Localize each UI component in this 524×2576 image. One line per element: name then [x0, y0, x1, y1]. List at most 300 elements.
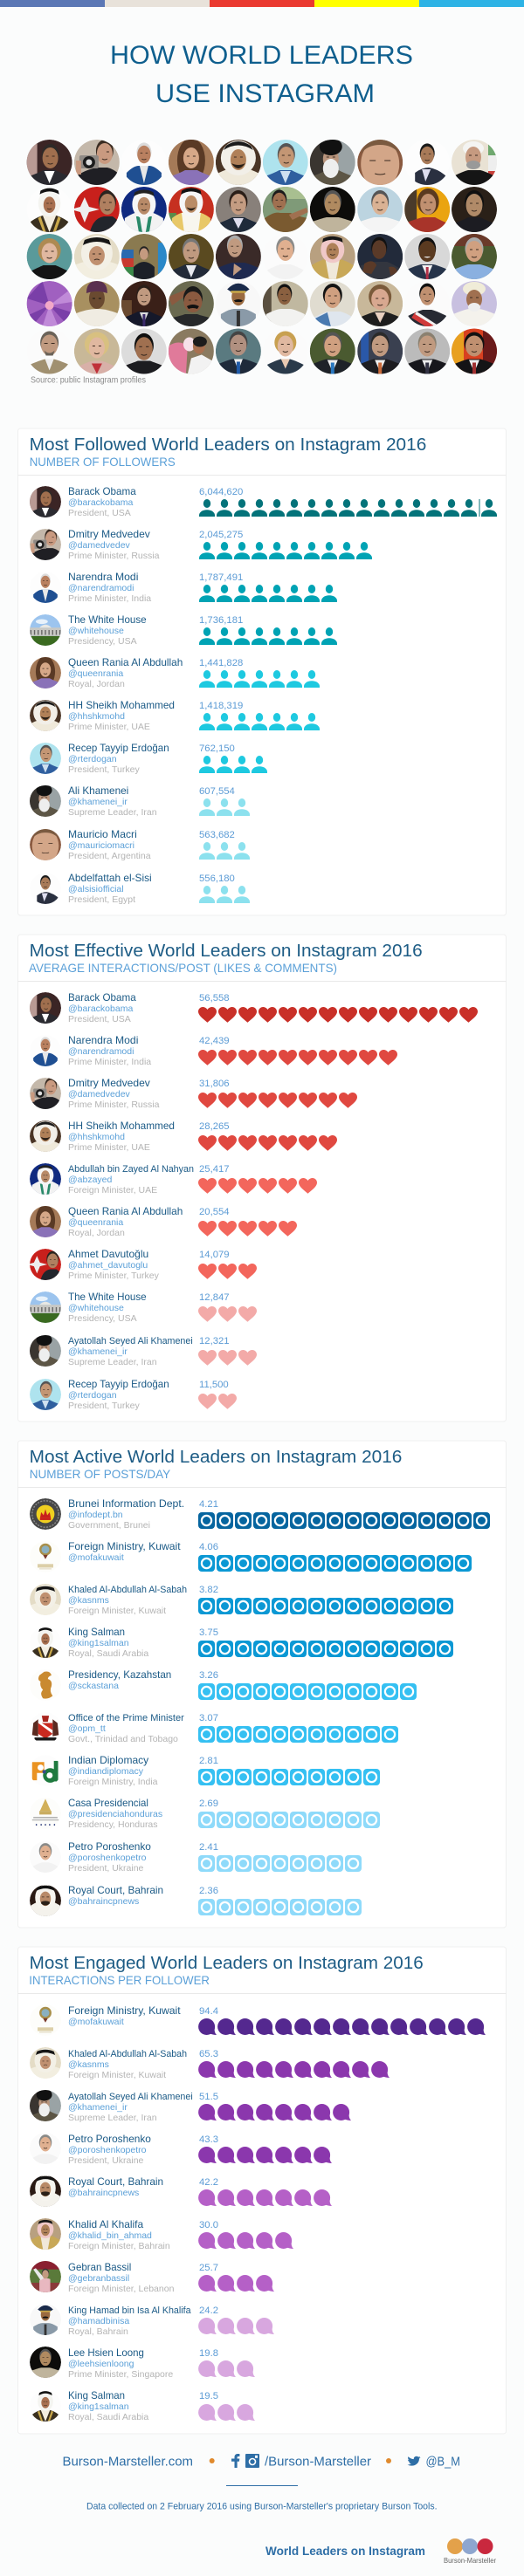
heart icons	[198, 1007, 479, 1023]
heading: most engaged: Most Engaged World Leaders on Instagram 2016	[30, 1954, 424, 1973]
name block: Prime Minister, UAE	[68, 722, 150, 732]
name block: Presidency, Kazahstan	[68, 1668, 171, 1681]
value: 2.69	[199, 1798, 218, 1809]
value: 1,441,828	[199, 658, 243, 668]
name block	[68, 571, 151, 604]
followers icons	[199, 670, 321, 688]
logo: Brunei crest	[30, 1498, 61, 1530]
name block: King Salman	[68, 1626, 125, 1638]
post icons	[198, 1769, 382, 1785]
logo: Kazakhstan dragon	[30, 1669, 61, 1701]
followers icons	[199, 886, 252, 903]
name block: Ahmet Davutoğlu	[68, 1248, 148, 1260]
name block: Presidency, Honduras	[68, 1819, 158, 1830]
value: 2.41	[199, 1842, 218, 1853]
name block: Presidency, USA	[68, 1313, 137, 1324]
heading: most active: NUMBER OF POSTS/DAY	[30, 1467, 171, 1481]
followers icons	[199, 798, 252, 816]
name block	[68, 1585, 187, 1616]
value: 563,682	[199, 830, 235, 840]
footer tagline: World Leaders on Instagram	[265, 2544, 425, 2558]
value: 2,045,275	[199, 530, 243, 540]
name block: @khalid_bin_ahmad	[68, 2230, 152, 2241]
value: 3.82	[199, 1585, 218, 1595]
row: The White House	[30, 613, 339, 647]
name block	[68, 2218, 170, 2251]
value: 607,554	[199, 786, 235, 797]
name block: President, Turkey	[68, 1401, 140, 1411]
post icons	[198, 1899, 363, 1915]
name block: Supreme Leader, Iran	[68, 807, 157, 818]
value: 556,180	[199, 874, 235, 884]
name block: Royal, Saudi Arabia	[68, 2412, 148, 2422]
name block: Petro Poroshenko	[68, 1840, 151, 1853]
icon: instagram	[245, 2454, 259, 2468]
name block	[68, 2346, 173, 2380]
name block: Khaled Al-Abdullah Al-Sabah	[68, 2049, 187, 2059]
name block	[68, 2092, 193, 2123]
name block	[68, 2049, 187, 2080]
name block	[68, 1626, 148, 1659]
name block	[68, 1378, 169, 1411]
name block: Abdullah bin Zayed Al Nahyan	[68, 1164, 194, 1175]
row: Ahmet Davutoglu	[27, 1248, 259, 1281]
name block: Foreign Minister, Lebanon	[68, 2284, 175, 2294]
name block: Office of the Prime Minister	[68, 1713, 184, 1723]
name block: Royal, Jordan	[68, 1228, 125, 1238]
name block: Dmitry Medvedev	[68, 1077, 150, 1089]
name block: Govt., Trinidad and Tobago	[68, 1734, 178, 1744]
name block: @damedvedev	[68, 540, 131, 551]
name block: President, Ukraine	[68, 2155, 144, 2166]
row: Dmitry Medvedev	[30, 1077, 359, 1110]
row: Recep Tayyip Erdogan	[30, 1378, 238, 1411]
followers icons	[199, 842, 252, 860]
heading: most effective	[29, 942, 423, 975]
portrait: Erdogan	[30, 1379, 61, 1410]
value: 1,418,319	[199, 701, 243, 711]
name block: Barack Obama	[68, 485, 136, 497]
name block: Supreme Leader, Iran	[68, 1357, 157, 1367]
name block	[68, 613, 147, 647]
value: 42.2	[199, 2177, 218, 2188]
portrait: Abdullah bin Zayed	[30, 1163, 61, 1195]
post icons	[198, 1812, 382, 1828]
name block: King Salman	[68, 2389, 125, 2401]
row: Queen Rania Al Abdullah	[30, 1205, 299, 1238]
row: Foreign Ministry, Kuwait	[30, 2004, 486, 2036]
name block: Prime Minister, Russia	[68, 1100, 160, 1110]
name block: Ayatollah Seyed Ali Khamenei	[68, 2092, 193, 2102]
name block	[68, 528, 160, 561]
name block: @poroshenkopetro	[68, 2145, 147, 2155]
name block	[68, 1668, 171, 1691]
name block: Narendra Modi	[68, 571, 138, 583]
name block: @sckastana	[68, 1681, 119, 1691]
portrait: Narendra Modi	[33, 1037, 58, 1066]
heading: most followed: Most Followed World Leaders on Instagram 2016	[30, 435, 426, 455]
name block: Khalid Al Khalifa	[68, 2218, 144, 2230]
row: Gebran Bassil	[30, 2261, 275, 2294]
speech bubble icons	[198, 2018, 486, 2035]
name block: @mauriciomacri	[68, 840, 134, 851]
name block: @poroshenkopetro	[68, 1853, 147, 1863]
name block	[68, 2305, 191, 2337]
name block: @indiandiplomacy	[68, 1766, 144, 1777]
speech bubble icons	[198, 2189, 333, 2206]
name block	[68, 1840, 151, 1874]
value: 6,044,620	[199, 487, 243, 497]
heart icons	[198, 1178, 319, 1194]
name block: Gebran Bassil	[68, 2261, 131, 2273]
post icons	[198, 1683, 418, 1700]
value: 25,417	[199, 1164, 230, 1175]
name block: @hamadbinisa	[68, 2316, 129, 2326]
row: The White House	[30, 1291, 259, 1324]
logo: Honduras crest	[30, 1798, 61, 1829]
name block	[68, 1164, 194, 1196]
name block: President, USA	[68, 508, 131, 518]
name block: Petro Poroshenko	[68, 2133, 151, 2145]
name block: @narendramodi	[68, 1046, 134, 1057]
value: 3.26	[199, 1670, 218, 1681]
row: King Hamad bin Isa Al Khalifa	[30, 2304, 275, 2337]
row: Royal Court, Bahrain	[30, 2175, 333, 2207]
name block	[68, 1497, 184, 1531]
name block: HH Sheikh Mohammed	[68, 1120, 175, 1132]
name block: Royal, Saudi Arabia	[68, 1648, 148, 1659]
title	[110, 41, 413, 108]
name block: The White House	[68, 1291, 147, 1303]
heart icons	[198, 1306, 259, 1322]
row: Brunei Information Dept.	[30, 1497, 492, 1531]
speech bubble icons	[198, 2232, 294, 2249]
name block: @rterdogan	[68, 1390, 117, 1401]
value: 30.0	[199, 2220, 218, 2230]
name block: Prime Minister, Singapore	[68, 2369, 173, 2380]
value: 19.5	[199, 2391, 218, 2401]
name block: @mofakuwait	[68, 1552, 124, 1563]
name block	[68, 2389, 148, 2422]
row: Petro Poroshenko	[30, 2133, 333, 2166]
name block: Foreign Minister, Kuwait	[68, 1606, 166, 1616]
heart icons	[198, 1221, 299, 1237]
portrait: Dmitry Medvedev	[30, 529, 61, 560]
name block: @hhshkmohd	[68, 1132, 125, 1142]
name block: @alsisiofficial	[68, 884, 124, 894]
speech bubble icons	[198, 2318, 275, 2334]
portrait: Barack Obama	[30, 486, 61, 517]
name block	[68, 1884, 163, 1907]
row: Ayatollah Seyed Ali Khamenei	[30, 1334, 259, 1367]
name block: @presidenciahonduras	[68, 1809, 162, 1819]
portrait: Khaled Al-Sabah	[30, 2047, 61, 2079]
portrait: Ahmet Davutoglu	[27, 1249, 61, 1280]
portrait: The White House	[30, 614, 61, 646]
footer links	[63, 2454, 460, 2470]
portrait: King Salman	[30, 1627, 61, 1658]
row: Barack Obama	[30, 991, 479, 1024]
name block: Foreign Minister, UAE	[68, 1185, 157, 1196]
name block: Presidency, USA	[68, 636, 137, 647]
row: Queen Rania Al Abdullah	[30, 656, 321, 689]
name block: Queen Rania Al Abdullah	[68, 656, 183, 668]
value: 11,500	[199, 1380, 229, 1390]
footer links: @B_M	[426, 2454, 460, 2470]
portrait: Ayatollah Khamenei	[30, 2089, 61, 2121]
followers icons	[199, 713, 321, 730]
portrait: Lee Hsien Loong	[30, 2346, 61, 2378]
post icons	[198, 1726, 400, 1743]
row: Narendra Modi	[33, 1037, 397, 1066]
heart icons	[198, 1394, 238, 1409]
speech bubble icons	[198, 2404, 256, 2421]
portrait: Gebran Bassil	[30, 2261, 61, 2292]
name block: Prime Minister, UAE	[68, 1142, 150, 1153]
portrait: Queen Rania	[30, 656, 61, 689]
colour strip	[0, 0, 524, 7]
name block: @barackobama	[68, 497, 133, 508]
value: 20,554	[199, 1207, 230, 1217]
value: 1,787,491	[199, 572, 243, 583]
row: King Salman	[30, 1626, 455, 1659]
value: 3.75	[199, 1627, 218, 1638]
post icons	[198, 1855, 363, 1872]
name block: Dmitry Medvedev	[68, 528, 150, 540]
heading: most engaged: INTERACTIONS PER FOLLOWER	[29, 1973, 210, 1987]
portrait: King Hamad	[30, 2304, 61, 2335]
name block: King Hamad bin Isa Al Khalifa	[68, 2305, 191, 2316]
value: 2.36	[199, 1886, 218, 1896]
speech bubble icons	[198, 2104, 352, 2120]
portrait: Petro Poroshenko	[30, 1841, 61, 1873]
title: HOW WORLD LEADERS	[110, 41, 413, 70]
value: 762,150	[199, 743, 235, 754]
portrait: Narendra Modi	[33, 573, 58, 603]
row: Casa Presidencial	[30, 1797, 382, 1830]
logo: Burson-Marsteller: Burson-Marsteller	[444, 2556, 496, 2565]
name block: @khamenei_ir	[68, 1346, 128, 1357]
name block: The White House	[68, 613, 147, 626]
row: Barack Obama	[30, 485, 499, 518]
value: 31,806	[199, 1079, 230, 1089]
data note: Data collected on 2 February 2016 using Burson-Marsteller's proprietary Burson Tools.	[86, 2501, 437, 2511]
heading: most effective: AVERAGE INTERACTIONS/POST (LIKES & COMMENTS)	[29, 961, 337, 975]
name block: Barack Obama	[68, 991, 136, 1004]
footer links: Burson-Marsteller.com	[63, 2454, 193, 2470]
name block	[68, 1120, 175, 1153]
name block	[68, 991, 136, 1024]
portrait: Khaled Al-Sabah	[30, 1584, 61, 1615]
heading: most effective: Most Effective World Leaders on Instagram 2016	[30, 942, 423, 961]
name block: Recep Tayyip Erdoğan	[68, 1378, 169, 1390]
row: Indian Diplomacy	[30, 1754, 382, 1787]
followers icons	[199, 756, 269, 773]
name block: @infodept.bn	[68, 1510, 123, 1520]
name block	[68, 2133, 151, 2166]
name block: HH Sheikh Mohammed	[68, 699, 175, 711]
row: Royal Court, Bahrain	[30, 1884, 363, 1916]
panel: most effective	[17, 935, 507, 1422]
source note: Source: public Instagram profiles	[31, 375, 146, 386]
name block: @bahraincpnews	[68, 1896, 139, 1907]
speech bubble icons	[198, 2147, 333, 2163]
footer links: /Burson-Marsteller	[265, 2454, 371, 2470]
portrait: Queen Rania	[30, 1205, 61, 1237]
name block: Prime Minister, Russia	[68, 551, 160, 561]
name block: Royal Court, Bahrain	[68, 1884, 163, 1896]
name block: @king1salman	[68, 2401, 129, 2412]
name block	[68, 872, 152, 905]
portrait: Abdelfattah el-Sisi	[37, 875, 58, 904]
name block	[68, 1248, 160, 1281]
name block	[68, 2004, 181, 2027]
name block	[68, 1713, 184, 1744]
row: Abdelfattah el-Sisi	[37, 874, 250, 904]
name block: @khamenei_ir	[68, 2102, 128, 2113]
row: HH Sheikh Mohammed	[30, 699, 321, 732]
row: Petro Poroshenko	[30, 1840, 363, 1874]
row: Dmitry Medvedev	[30, 528, 374, 561]
name block: President, Turkey	[68, 764, 140, 775]
panel: most active	[17, 1441, 507, 1928]
portrait: Mauricio Macri	[30, 829, 61, 863]
name block: @queenrania	[68, 668, 123, 679]
name block: @king1salman	[68, 1638, 129, 1648]
portrait: Royal Court	[30, 1885, 61, 1916]
value: 14,079	[199, 1250, 230, 1260]
value: 42,439	[199, 1036, 230, 1046]
name block	[68, 1205, 183, 1238]
value: 65.3	[199, 2049, 218, 2059]
speech bubble icons	[198, 2360, 256, 2377]
name block: @leehsienloong	[68, 2359, 134, 2369]
portrait: King Salman	[30, 2390, 61, 2422]
portrait: Petro Poroshenko	[30, 2133, 61, 2164]
name block	[68, 656, 183, 689]
name block: Prime Minister, Turkey	[68, 1271, 160, 1281]
portrait: Erdogan	[30, 743, 61, 774]
name block: Narendra Modi	[68, 1034, 138, 1046]
heart icons	[198, 1093, 359, 1108]
value: 28,265	[199, 1121, 230, 1132]
row: Lee Hsien Loong	[30, 2346, 256, 2380]
value: 51.5	[199, 2092, 218, 2102]
heart icons	[198, 1050, 399, 1065]
name block: @opm_tt	[68, 1723, 106, 1734]
value: 1,736,181	[199, 615, 243, 626]
name block: Supreme Leader, Iran	[68, 2113, 157, 2123]
name block: @abzayed	[68, 1175, 113, 1185]
portrait: The White House	[30, 1291, 61, 1323]
name block: Queen Rania Al Abdullah	[68, 1205, 183, 1217]
name block	[68, 1754, 158, 1787]
name block: President, Argentina	[68, 851, 151, 861]
name block: @kasnms	[68, 2059, 109, 2070]
name block	[68, 784, 157, 818]
speech bubble icons	[198, 2275, 275, 2292]
name block	[68, 1336, 193, 1367]
panel: most followed	[17, 428, 507, 915]
portrait: Ayatollah Khamenei	[30, 1334, 61, 1367]
row: Khaled Al-Abdullah Al-Sabah	[30, 2047, 390, 2080]
name block: Abdelfattah el-Sisi	[68, 872, 152, 884]
name block: Lee Hsien Loong	[68, 2346, 144, 2359]
name block: Foreign Ministry, Kuwait	[68, 1540, 181, 1552]
value: 12,321	[199, 1336, 230, 1346]
name block: @mofakuwait	[68, 2017, 124, 2027]
portrait: Royal Court	[30, 2175, 61, 2207]
value: 19.8	[199, 2348, 218, 2359]
name block	[68, 2175, 163, 2198]
name block: President, Egypt	[68, 894, 135, 905]
post icons	[198, 1512, 492, 1529]
row: Abdullah bin Zayed Al Nahyan	[30, 1163, 319, 1196]
name block: @queenrania	[68, 1217, 123, 1228]
value: 94.4	[199, 2006, 218, 2017]
name block: Royal, Jordan	[68, 679, 125, 689]
name block: Prime Minister, India	[68, 593, 151, 604]
name block: Mauricio Macri	[68, 828, 137, 840]
name block: @rterdogan	[68, 754, 117, 764]
panel: most engaged	[17, 1947, 507, 2434]
heading: most active	[30, 1448, 402, 1481]
name block: Royal, Bahrain	[68, 2326, 128, 2337]
name block	[68, 699, 175, 732]
name block	[68, 1291, 147, 1324]
portrait grid	[27, 138, 497, 373]
value: 43.3	[199, 2134, 218, 2145]
name block: Foreign Minister, Bahrain	[68, 2241, 170, 2251]
name block	[68, 485, 136, 518]
name block	[68, 2261, 175, 2294]
name block: Foreign Ministry, Kuwait	[68, 2004, 181, 2017]
value: 4.06	[199, 1542, 218, 1552]
portrait: Khalid Al Khalifa	[30, 2218, 61, 2250]
icon: twitter	[407, 2456, 421, 2466]
logo: Burson-Marsteller	[444, 2538, 496, 2565]
name block: @kasnms	[68, 1595, 109, 1606]
name block	[68, 742, 169, 775]
name block: Recep Tayyip Erdoğan	[68, 742, 169, 754]
post icons	[198, 1555, 473, 1572]
portrait: HH Sheikh Mohammed	[30, 700, 61, 731]
row: Khalid Al Khalifa	[30, 2218, 294, 2251]
name block: @ahmet_davutoglu	[68, 1260, 148, 1271]
row: Mauricio Macri	[30, 829, 250, 860]
name block: @narendramodi	[68, 583, 134, 593]
name block: @whitehouse	[68, 1303, 124, 1313]
post icons	[198, 1641, 455, 1657]
name block: Prime Minister, India	[68, 1057, 151, 1067]
row: Presidency, Kazahstan	[30, 1668, 418, 1701]
heart icons	[198, 1350, 259, 1366]
row: Narendra Modi	[33, 572, 337, 603]
name block: @damedvedev	[68, 1089, 131, 1100]
portrait: Dmitry Medvedev	[30, 1078, 61, 1109]
heading: most active: Most Active World Leaders on Instagram 2016	[30, 1448, 402, 1467]
name block: Ali Khamenei	[68, 784, 128, 797]
heading: most followed: NUMBER OF FOLLOWERS	[30, 455, 176, 469]
row: Khaled Al-Abdullah Al-Sabah	[30, 1584, 455, 1616]
name block: Indian Diplomacy	[68, 1754, 148, 1766]
heart icons	[198, 1135, 339, 1151]
post icons	[198, 1598, 455, 1614]
portrait: Barack Obama	[30, 992, 61, 1024]
logo: Kuwait crest	[30, 1541, 61, 1572]
logo: Trinidad and Tobago crest	[30, 1712, 61, 1744]
name block: @barackobama	[68, 1004, 133, 1014]
